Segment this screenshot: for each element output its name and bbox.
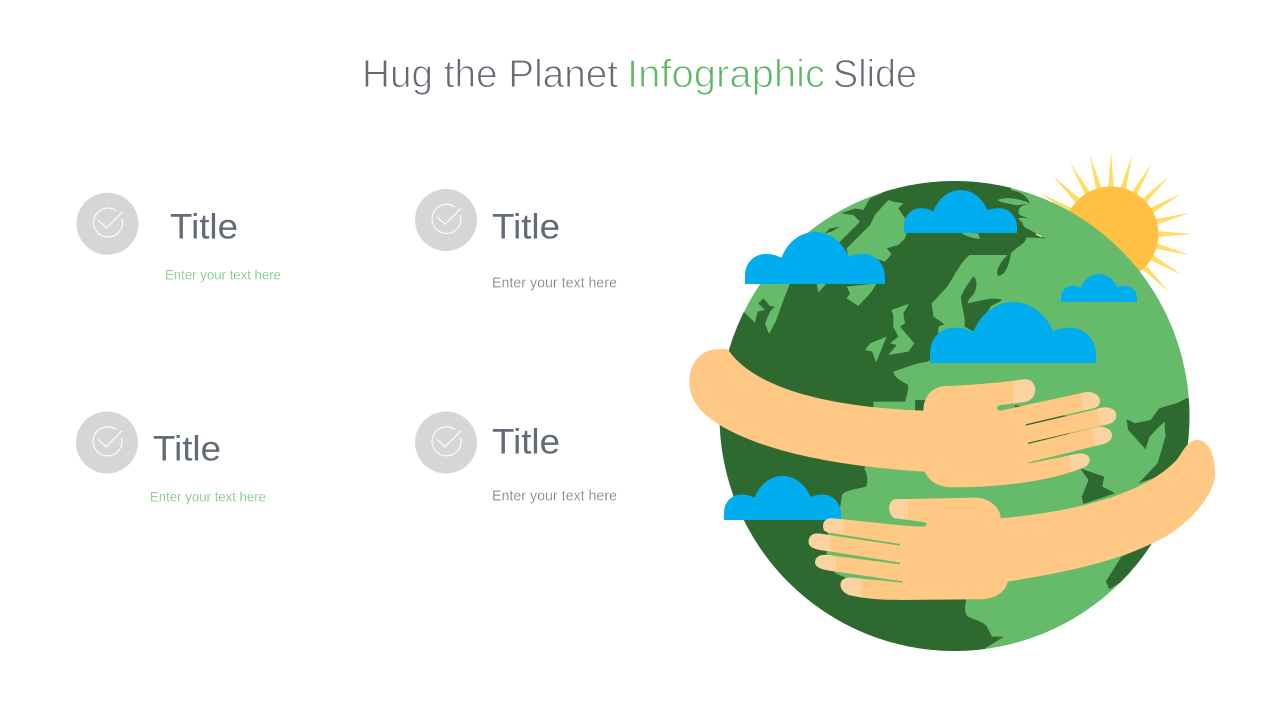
dark landmass: lower right — [1106, 544, 1152, 590]
panel: item 3 — [76, 412, 266, 504]
globe — [720, 181, 1190, 651]
icon: check badge 1 — [76, 193, 138, 255]
dark inlet: Baltic — [961, 277, 1002, 333]
icon: check badge 2 — [415, 189, 477, 251]
dark landmass: centre right — [1080, 468, 1115, 504]
title — [362, 53, 917, 96]
dark landmass: right side — [1126, 398, 1190, 484]
upper arm and hand — [689, 349, 1118, 487]
heading: item 2: Title — [492, 207, 560, 246]
dark landmass: main — [714, 173, 1045, 673]
panel: item 1 — [76, 193, 281, 282]
text block: item 4: Enter your text here — [492, 487, 617, 504]
panel: item 4 — [415, 412, 617, 504]
title: Hug the Planet — [362, 53, 618, 96]
heading: item 4: Title — [492, 422, 560, 461]
panel: item 2 — [415, 189, 617, 291]
light landmass: behind lower hand — [826, 518, 902, 583]
light landmass: Greenland and north Atlantic islands — [817, 200, 947, 362]
dark landmass: small islands — [825, 227, 1070, 447]
cloud 5 — [724, 476, 841, 520]
slide canvas — [76, 59, 1216, 651]
text block: item 1: Enter your text here — [165, 266, 281, 282]
icon: sun — [1038, 152, 1193, 294]
text block: item 3: Enter your text here — [150, 488, 266, 504]
yellow sliver — [1036, 234, 1042, 237]
title: Slide — [833, 53, 917, 96]
icon: check badge 4 — [415, 412, 477, 474]
cloud 1 — [745, 232, 885, 284]
cloud 4 — [930, 302, 1096, 363]
heading: item 1: Title — [170, 207, 238, 246]
title: Infographic — [627, 53, 825, 96]
light landmass: north coast strips — [939, 198, 1032, 337]
lower arm and hand — [807, 440, 1215, 600]
cloud 2 — [904, 190, 1017, 233]
heading: item 3: Title — [153, 429, 221, 468]
cloud 3 — [1061, 274, 1137, 302]
icon: check badge 3 — [76, 412, 138, 474]
text block: item 2: Enter your text here — [492, 274, 617, 291]
